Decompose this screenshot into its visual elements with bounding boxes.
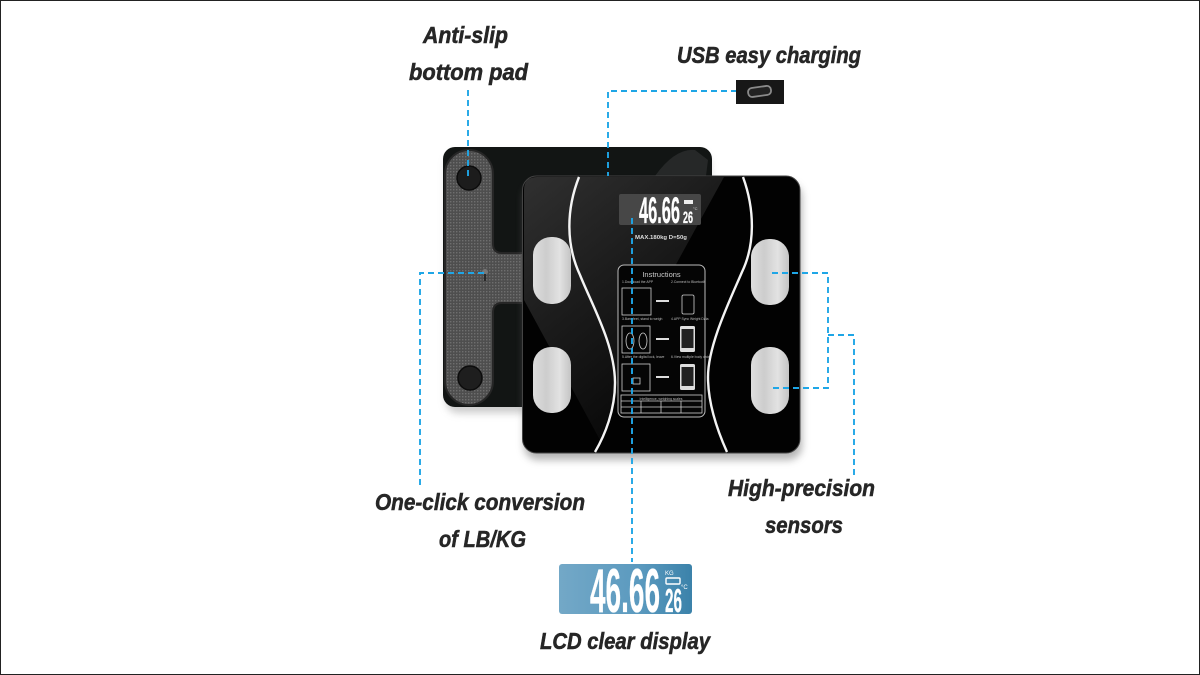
electrode: bottom left: [533, 347, 571, 413]
callout line: USB charging: [608, 91, 737, 176]
LCD on scale: [619, 190, 701, 231]
instructions panel: 6.View multiple body data: [671, 355, 710, 359]
instructions panel: 5.After the digital lock, leave: [622, 355, 665, 359]
rubber foot: top: [457, 166, 481, 190]
label: high-precision sensors: sensors: [765, 512, 843, 538]
instructions panel: 2.Connect to Bluetooth: [671, 280, 706, 284]
rubber foot: bottom: [458, 366, 482, 390]
label: anti-slip bottom pad: [409, 22, 529, 85]
label: high-precision sensors: High-precision: [728, 475, 875, 501]
callout line: unit conversion: [420, 273, 484, 488]
LCD on scale: 46.66: [639, 190, 680, 231]
label: one-click conversion: One-click conversion: [375, 489, 585, 515]
label: anti-slip bottom pad: bottom pad: [409, 59, 529, 85]
body curve: right: [708, 177, 752, 452]
enlarged LCD display: °C: [681, 585, 688, 591]
LCD on scale: 26: [683, 208, 693, 227]
scale: rear view: [443, 147, 712, 413]
callout line: LCD display: [631, 218, 633, 562]
label: one-click conversion: of LB/KG: [439, 526, 526, 552]
anti-slip pad: [445, 150, 526, 405]
instructions panel: 4.APP Sync Weight Data: [671, 317, 709, 321]
electrode: top right: [751, 239, 789, 305]
label: anti-slip bottom pad: Anti-slip: [422, 22, 508, 48]
callout line: anti-slip pad: [467, 90, 469, 178]
label: USB easy charging: USB easy charging: [677, 42, 861, 68]
instructions panel: [618, 265, 710, 417]
capacity text: MAX.180kg D=50g: [635, 235, 688, 241]
enlarged LCD display: KG: [665, 571, 674, 577]
conversion switch: [482, 269, 488, 281]
body curve: left: [569, 177, 615, 452]
instructions panel: Instructions: [642, 270, 681, 279]
instructions panel: 1.Download the APP: [622, 280, 654, 284]
glass reflection: [524, 177, 724, 440]
electrode: bottom right: [751, 347, 789, 414]
callout line: sensors: [770, 273, 854, 475]
LCD on scale: °C: [693, 206, 698, 211]
label: high-precision sensors: [728, 475, 875, 538]
label: one-click conversion: [375, 489, 585, 552]
instructions panel: Intelligence, weighing scales: [640, 397, 683, 401]
enlarged LCD display: [559, 557, 692, 626]
scale: front view: [522, 176, 802, 460]
label: LCD clear display: LCD clear display: [540, 628, 711, 654]
instructions panel: 3.Bare feet, stand to weigh: [622, 317, 662, 321]
enlarged LCD display: 46.66: [590, 557, 660, 626]
icon: USB port: [736, 80, 784, 104]
electrode: top left: [533, 237, 571, 304]
enlarged LCD display: 26: [665, 582, 682, 619]
